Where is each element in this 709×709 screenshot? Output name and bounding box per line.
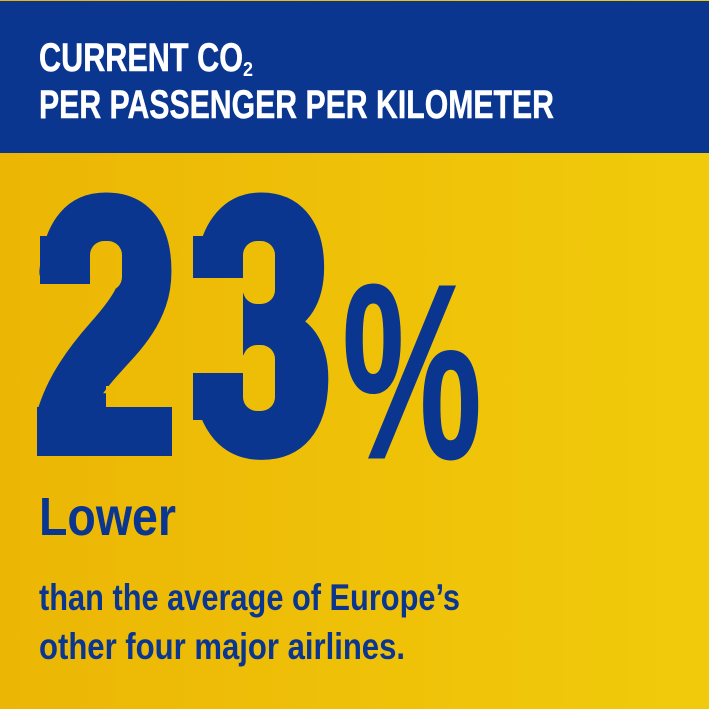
heading: current CO2 per passenger per kilometer: CURRENT CO: [39, 36, 243, 80]
text block: comparison description: [39, 577, 460, 667]
heading: current CO2 per passenger per kilometer: [39, 36, 554, 127]
big number: 23 percent: [30, 134, 482, 517]
text block: comparison description: than the average of Europe’s: [39, 577, 460, 618]
panel: blue header band: [0, 1, 709, 153]
digit 2: 2: [38, 134, 175, 517]
digit 3: 3: [196, 134, 329, 517]
heading: current CO2 per passenger per kilometer: 2: [243, 59, 253, 81]
label: Lower: Lower: [39, 487, 176, 547]
percent sign: %: [342, 233, 482, 512]
heading: current CO2 per passenger per kilometer: PER PASSENGER PER KILOMETER: [39, 83, 554, 127]
text block: comparison description: other four major airlines.: [39, 626, 405, 667]
